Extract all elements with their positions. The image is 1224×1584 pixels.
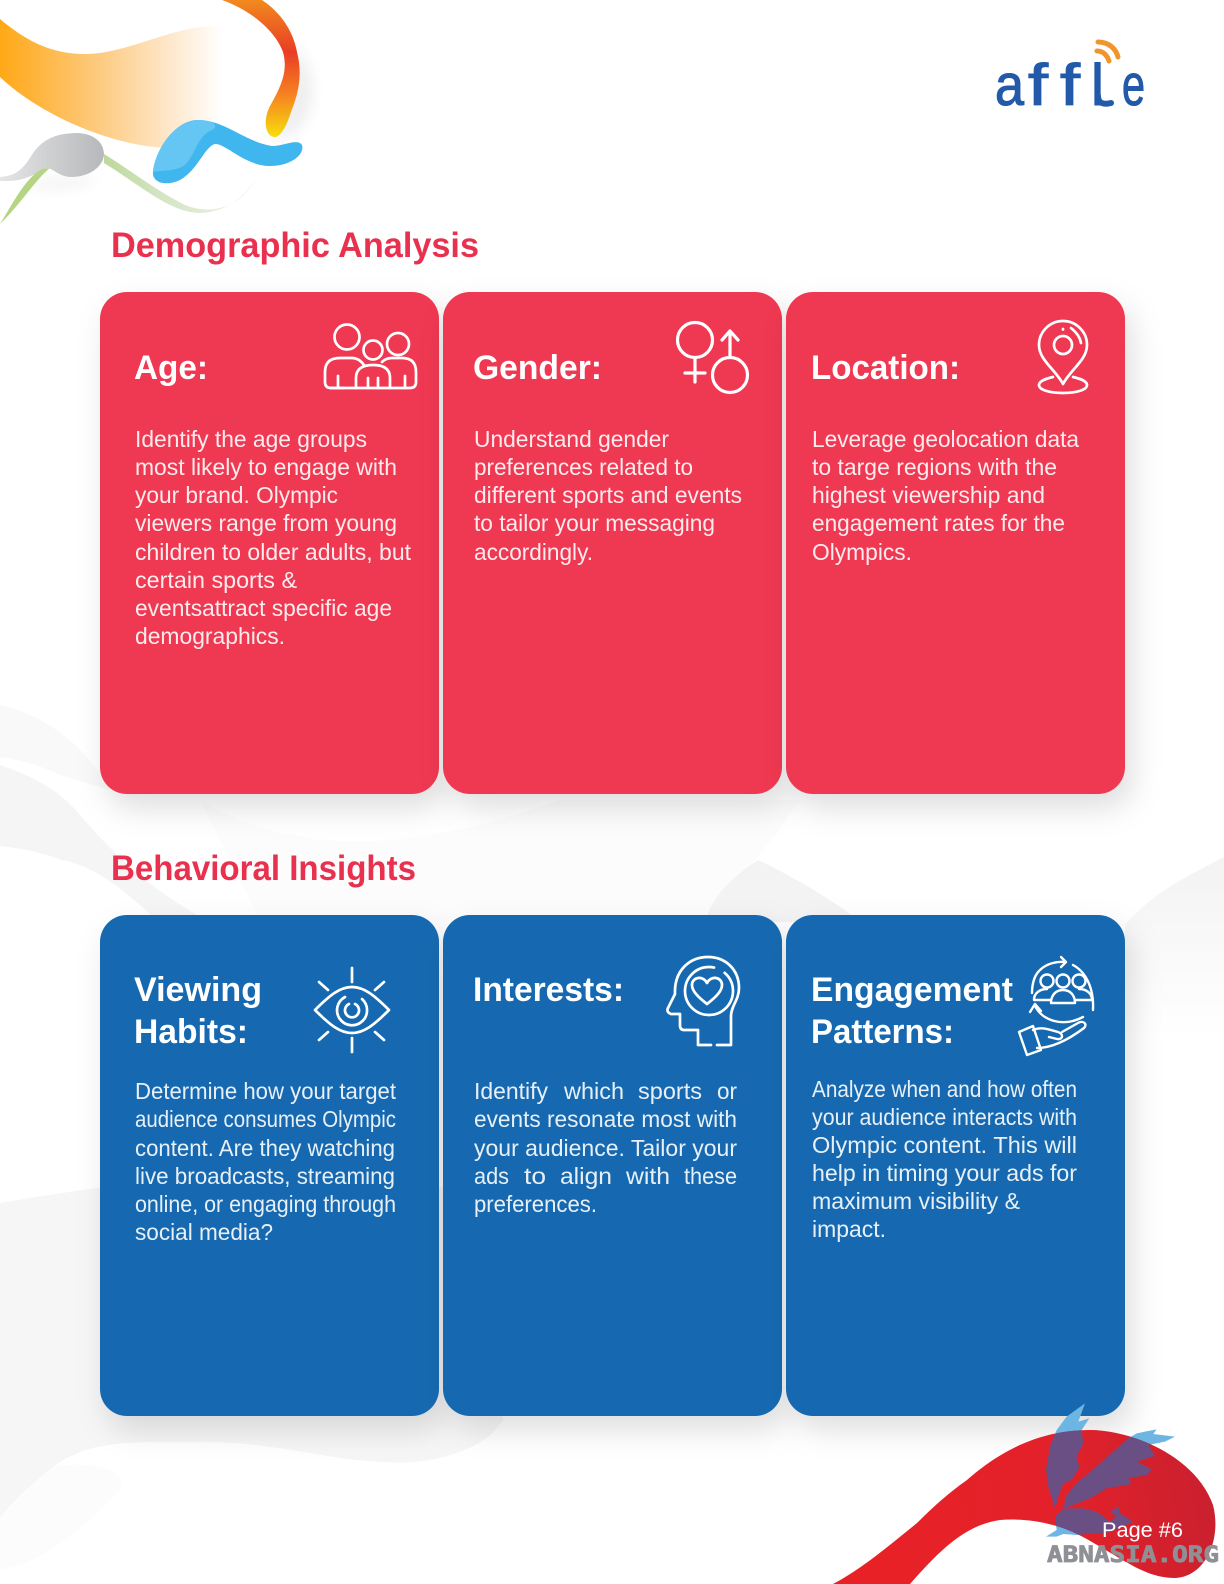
card title	[811, 971, 1013, 1051]
body text: certain sports &	[135, 567, 297, 593]
card title: Age:	[134, 349, 208, 387]
body text: Understand gender	[474, 426, 669, 452]
soft shadows	[20, 45, 312, 187]
body text	[135, 426, 411, 649]
logo wordmark: a	[995, 53, 1025, 118]
panel: Engagement Patterns	[786, 915, 1125, 1416]
card title: Viewing	[134, 971, 262, 1009]
icon: eye	[315, 968, 389, 1052]
body text: to	[524, 1163, 546, 1189]
card	[443, 915, 782, 1416]
card title: Patterns:	[811, 1013, 954, 1051]
card title: Engagement	[811, 971, 1013, 1009]
body text: sports	[638, 1078, 702, 1104]
card title: Location:	[811, 349, 960, 387]
body text: to targe regions with the	[812, 454, 1057, 480]
bird watermark: light blue	[1046, 1403, 1175, 1537]
body text: Olympics.	[812, 539, 912, 565]
watermark text: ABNASIA.ORG	[1047, 1543, 1219, 1568]
blue swoosh	[153, 120, 302, 183]
icon: gender symbols	[678, 322, 748, 392]
body text: live broadcasts, streaming	[135, 1163, 395, 1189]
body text: social media?	[135, 1219, 273, 1245]
panel: Location	[786, 292, 1125, 794]
body text: eventsattract specific age	[135, 595, 392, 621]
card title: Interests:	[473, 971, 624, 1009]
body text: Identify	[474, 1078, 548, 1104]
body text: with	[625, 1163, 670, 1189]
body text: content. Are they watching	[135, 1135, 395, 1161]
logo: affle	[995, 42, 1145, 118]
panel: Gender	[443, 292, 782, 794]
body text: your brand. Olympic	[135, 482, 338, 508]
logo wordmark	[995, 53, 1145, 118]
green ribbon	[104, 154, 258, 213]
body text: Identify the age groups	[135, 426, 367, 452]
logo wordmark: e	[1122, 53, 1145, 118]
card	[786, 292, 1125, 794]
body text: ads	[474, 1163, 509, 1189]
page number: Page #6	[1102, 1519, 1183, 1542]
card	[786, 915, 1125, 1416]
body text: Analyze when and how often	[812, 1076, 1077, 1102]
body text: which	[563, 1078, 624, 1104]
body text: children to older adults, but	[135, 539, 411, 565]
icon: community in hand	[1019, 957, 1093, 1055]
orange swoosh	[0, 19, 258, 148]
body text	[474, 426, 742, 565]
panel: Age	[100, 292, 439, 794]
bird watermark: over red	[1046, 1430, 1155, 1535]
panel: Viewing Habits	[100, 915, 439, 1416]
decorative art: top-left swoosh	[0, 0, 312, 224]
logo wordmark: l	[1091, 53, 1104, 118]
body text: engagement rates for the	[812, 510, 1065, 536]
icon: head with heart	[667, 957, 739, 1045]
body text: preferences related to	[474, 454, 693, 480]
body text: Leverage geolocation data	[812, 426, 1080, 452]
grey swoosh	[0, 133, 104, 181]
body text: online, or engaging through	[135, 1191, 396, 1217]
background swooshes	[0, 705, 1224, 1570]
body text: these	[684, 1163, 737, 1189]
card	[100, 292, 439, 794]
body text: different sports and events	[474, 482, 742, 508]
body text	[812, 426, 1080, 565]
body text: accordingly.	[474, 539, 593, 565]
panel: Interests	[443, 915, 782, 1416]
heading: Behavioral Insights: Behavioral Insights	[111, 849, 416, 888]
body text: most likely to engage with	[135, 454, 397, 480]
body text: your audience interacts with	[812, 1104, 1077, 1130]
body text: help in timing your ads for	[812, 1160, 1077, 1186]
logo l tail	[1098, 96, 1111, 104]
body text: audience consumes Olympic	[135, 1106, 396, 1132]
card	[443, 292, 782, 794]
green blade	[0, 168, 50, 224]
card title: Gender:	[473, 349, 602, 387]
body text: align	[560, 1163, 612, 1189]
body text: impact.	[812, 1216, 886, 1242]
body text: to tailor your messaging	[474, 510, 715, 536]
card	[100, 915, 439, 1416]
body text: demographics.	[135, 623, 285, 649]
body text: highest viewership and	[812, 482, 1045, 508]
icon: map pin	[1039, 321, 1087, 393]
body text: events resonate most with	[474, 1106, 737, 1132]
blue swoosh highlight	[153, 120, 215, 172]
logo signal arcs	[1097, 42, 1118, 61]
body text	[135, 1078, 396, 1245]
card title	[134, 971, 262, 1051]
red swoosh	[833, 1430, 1215, 1584]
body text: or	[717, 1078, 737, 1104]
red yellow streak	[222, 0, 300, 137]
logo wordmark: f	[1028, 53, 1049, 118]
body text: your audience. Tailor your	[474, 1135, 737, 1161]
decorative art: bottom-right swoosh with bird watermark	[833, 1403, 1215, 1584]
body text: Olympic content. This will	[812, 1132, 1077, 1158]
card title: Habits:	[134, 1013, 248, 1051]
body text: preferences.	[474, 1191, 597, 1217]
body text	[474, 1078, 737, 1217]
body text	[812, 1076, 1077, 1242]
heading: Demographic Analysis: Demographic Analysis	[111, 226, 479, 265]
body text: maximum visibility &	[812, 1188, 1020, 1214]
icon: family	[325, 324, 416, 388]
body text: viewers range from young	[135, 510, 397, 536]
logo wordmark: f	[1060, 53, 1081, 118]
body text: Determine how your target	[135, 1078, 396, 1104]
